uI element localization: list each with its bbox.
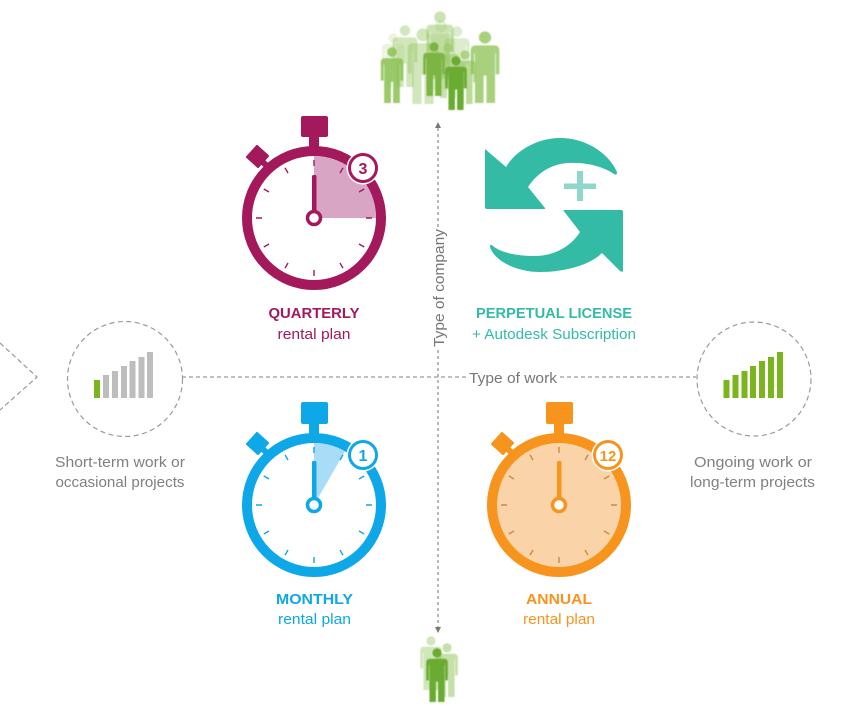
annual badge <box>592 438 624 472</box>
heading: annual <box>523 592 595 628</box>
monthly one-month wedge <box>314 443 345 505</box>
heading: monthly <box>276 592 353 628</box>
heading: perpetual license: + Autodesk Subscription <box>472 327 636 343</box>
plus sign <box>564 171 596 201</box>
monthly hand <box>308 461 320 512</box>
heading: perpetual license <box>472 306 636 343</box>
quarterly three-month wedge <box>314 156 376 218</box>
panel: ongoing work <box>690 322 815 491</box>
stopwatch: monthly <box>245 402 381 572</box>
quarterly hand <box>308 175 320 224</box>
label: type of company: Type of company <box>432 228 448 347</box>
annual badge: 12 <box>600 448 616 465</box>
heading: annual: ANNUAL <box>526 592 592 608</box>
annual hand <box>552 461 566 512</box>
bar icon: one green bar <box>94 352 153 398</box>
label: type of work: Type of work <box>469 371 558 387</box>
ongoing label <box>690 455 815 491</box>
stopwatch: quarterly <box>245 116 381 285</box>
icon: perpetual license renewal arrows <box>485 138 623 272</box>
heading: quarterly: rental plan <box>278 327 350 343</box>
axis: type of company vertical arrow <box>435 122 441 633</box>
ongoing label: Ongoing work or <box>694 455 812 471</box>
monthly face <box>247 438 381 572</box>
annual pusher buttons <box>490 402 573 458</box>
quarterly pusher buttons <box>245 116 328 171</box>
heading: quarterly <box>268 306 360 343</box>
quarterly badge <box>346 152 380 184</box>
icon: small group of people <box>420 636 458 702</box>
quarterly badge: 3 <box>359 161 368 178</box>
heading: monthly: rental plan <box>278 612 351 628</box>
monthly badge: 1 <box>359 448 368 465</box>
ongoing label: long-term projects <box>690 475 815 491</box>
short-term label <box>55 455 185 491</box>
axis: type of work horizontal line <box>182 376 696 378</box>
monthly badge <box>346 438 380 472</box>
heading: annual: rental plan <box>523 612 595 628</box>
annual filled face <box>492 438 626 572</box>
bar icon: all green bars <box>724 352 783 398</box>
chevron: left dashed arrow <box>0 343 37 410</box>
short-term label: occasional projects <box>56 475 184 491</box>
short-term label: Short-term work or <box>55 455 185 471</box>
heading: quarterly: QUARTERLY <box>268 306 360 322</box>
monthly pusher buttons <box>245 402 328 458</box>
heading: monthly: MONTHLY <box>276 592 353 608</box>
icon: large group of people <box>381 11 499 110</box>
heading: perpetual license: PERPETUAL LICENSE <box>476 306 632 322</box>
stopwatch: annual <box>490 402 626 572</box>
quarterly face <box>247 151 381 285</box>
panel: short-term work <box>55 322 185 491</box>
